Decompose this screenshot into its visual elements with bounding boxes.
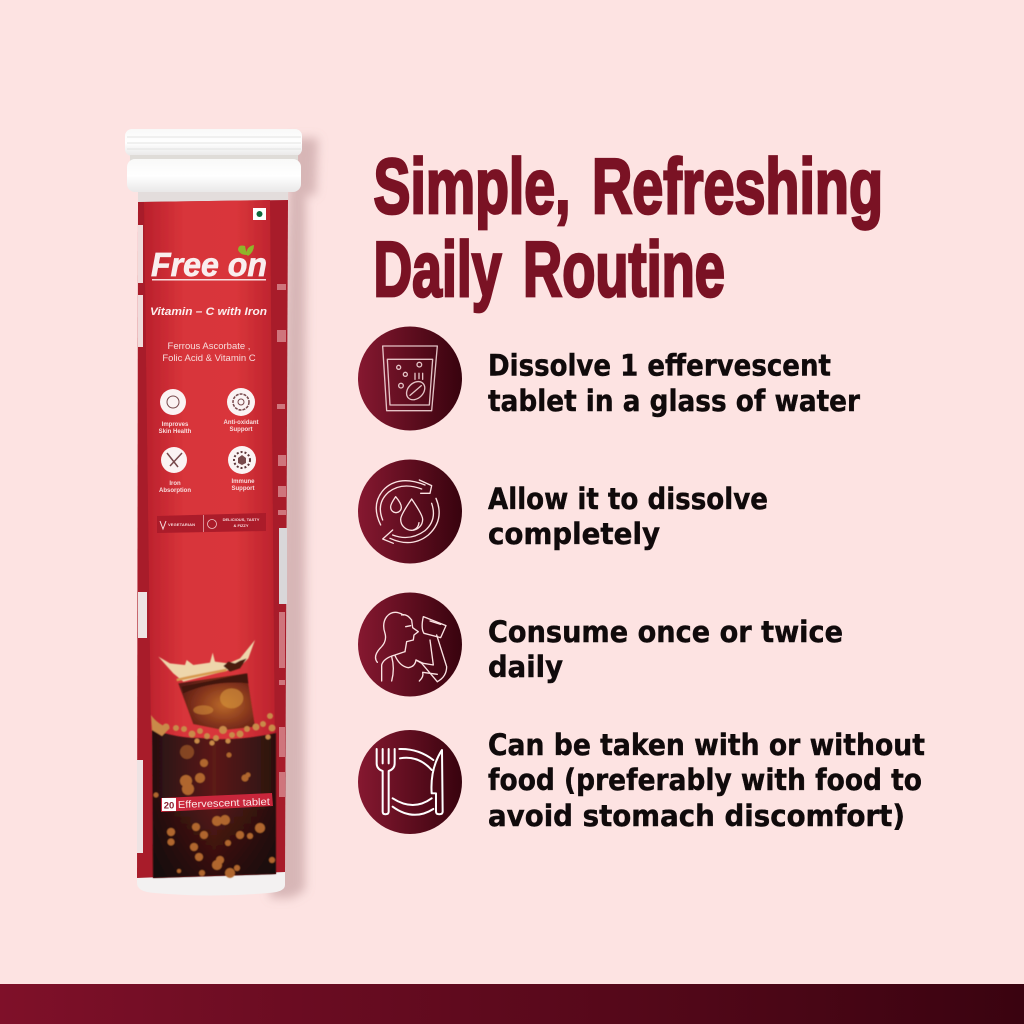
benefit: skin health <box>159 389 192 435</box>
step 2 text <box>488 482 768 551</box>
icon: glass with tablet <box>358 326 462 430</box>
benefit: iron absorption <box>159 447 191 494</box>
badge band: DELICIOUS, TASTY <box>223 517 260 522</box>
step 4 text <box>488 728 925 833</box>
badge band: & FIZZY <box>233 523 249 528</box>
title <box>374 142 883 313</box>
tube shadow <box>270 138 318 898</box>
step 3 text <box>488 615 843 684</box>
step 2 text: completely <box>488 517 660 551</box>
bubbles <box>154 745 275 878</box>
tablet count band: 20 <box>164 800 174 812</box>
brand logo: Free on <box>151 246 267 283</box>
step 4 <box>358 728 925 834</box>
surface foam <box>151 713 276 746</box>
title: Simple, <box>374 142 570 230</box>
benefit: skin health: Skin Health <box>159 429 192 435</box>
title: Daily <box>374 225 502 313</box>
benefit: iron absorption: Iron <box>169 481 181 487</box>
step 4 text: Can be taken with or without <box>488 728 925 762</box>
step 4 text: food (preferably with food to <box>488 763 922 797</box>
tube label back <box>137 200 288 878</box>
step 2 <box>358 460 768 564</box>
step 1 text <box>488 348 861 418</box>
benefit: skin health: Improves <box>162 422 189 428</box>
tablet count band: Effervescent tablet <box>178 797 270 811</box>
product tube <box>125 129 318 898</box>
badge band <box>157 513 266 533</box>
tube label front <box>144 200 276 878</box>
benefit: immune support <box>228 446 256 492</box>
title: Routine <box>523 225 725 313</box>
step 1 text: tablet in a glass of water <box>488 384 861 418</box>
ingredients: Ferrous Ascorbate , <box>168 341 250 352</box>
title: Refreshing <box>592 142 883 230</box>
cola glass <box>158 640 255 730</box>
icon: water cycle <box>358 460 462 564</box>
benefit: immune support: Support <box>232 486 254 492</box>
icon: plate and cutlery <box>358 730 462 834</box>
bottom bar <box>0 984 1024 1024</box>
splash <box>158 640 255 682</box>
benefit: antioxidant: Anti-oxidant <box>224 420 258 426</box>
tablet count band <box>161 793 273 812</box>
cola liquid <box>152 729 276 878</box>
benefit: antioxidant: Support <box>230 427 252 433</box>
benefit: immune support: Immune <box>231 479 255 485</box>
benefit: iron absorption: Absorption <box>159 488 191 494</box>
veg mark <box>253 208 266 220</box>
step 2 text: Allow it to dissolve <box>488 482 768 516</box>
step 3 text: Consume once or twice <box>488 615 843 649</box>
icon: woman drinking <box>358 592 462 696</box>
step 3 <box>358 592 843 696</box>
badge band: VEGETARIAN <box>168 522 195 527</box>
tube cap <box>125 129 302 192</box>
ingredients: Folic Acid & Vitamin C <box>162 353 256 364</box>
step 3 text: daily <box>488 650 563 684</box>
step 1 <box>358 326 861 430</box>
tube neck <box>138 190 288 204</box>
step 1 text: Dissolve 1 effervescent <box>488 348 831 382</box>
product name: Vitamin – C with Iron <box>150 306 267 318</box>
step 4 text: avoid stomach discomfort) <box>488 799 905 833</box>
benefit: antioxidant <box>224 388 258 433</box>
ingredients <box>162 341 256 364</box>
cola illustration <box>151 640 276 878</box>
side panel details <box>137 225 287 853</box>
tube base <box>137 860 285 896</box>
